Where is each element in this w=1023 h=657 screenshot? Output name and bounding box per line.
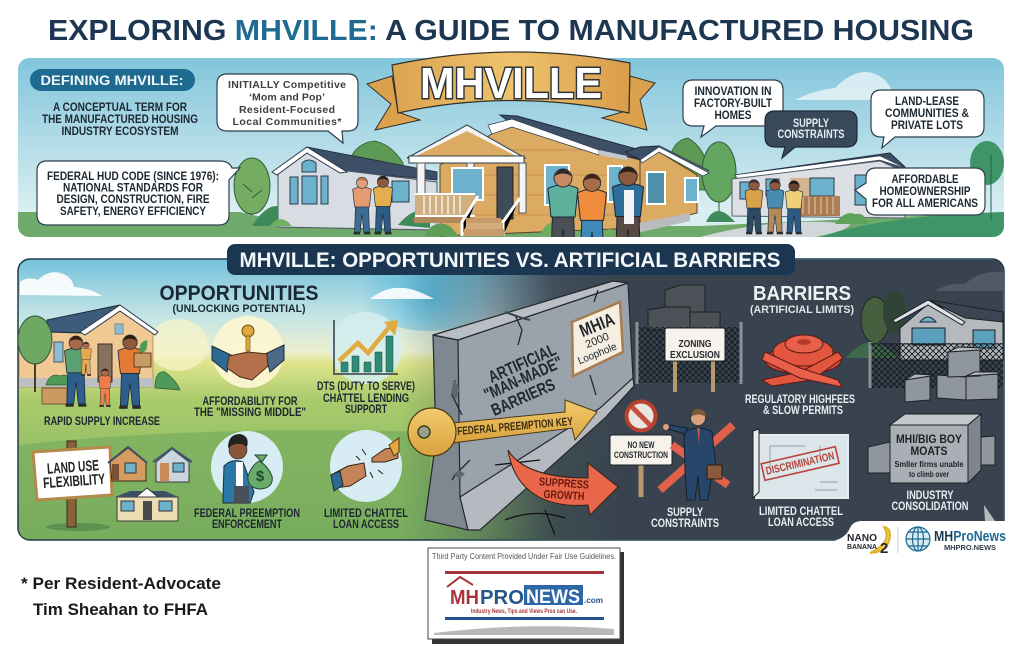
banner: MHVILLE: MHVILLE xyxy=(420,59,602,108)
callout: land-lease: LAND-LEASE xyxy=(895,96,959,108)
callout: affordable homeownership: HOMEOWNERSHIP xyxy=(880,186,971,198)
logo: MHProNews fair use: PRO xyxy=(480,587,524,609)
callout: innovation: FACTORY-BUILT xyxy=(694,98,772,110)
heading: opportunities xyxy=(160,282,318,315)
sign: land use flexibility: FLEXIBILITY xyxy=(43,471,106,492)
chart icon: DTS lending support: CHATTEL LENDING xyxy=(323,393,409,405)
heading: barriers xyxy=(750,283,854,316)
sign: MHIA loophole: Loophole xyxy=(576,341,619,367)
tree: left xyxy=(234,158,270,215)
callout: initially competitive: Local Communities* xyxy=(232,116,342,128)
arrow: federal preemption key: FEDERAL PREEMPTION KEY xyxy=(457,416,574,438)
logo: MHProNews fair use xyxy=(428,548,624,644)
illustration: big boy moats box: INDUSTRY xyxy=(906,490,954,502)
sign: MHIA loophole xyxy=(572,302,623,376)
callout: initially competitive: INITIALLY Competitive xyxy=(228,79,346,91)
people: couple xyxy=(353,176,392,234)
text: definition: THE MANUFACTURED HOUSING xyxy=(42,114,198,126)
illustration: big boy moats box: MHI/BIG BOY xyxy=(896,432,962,446)
heading: barriers: (ARTIFICIAL LIMITS) xyxy=(750,304,854,316)
illustration: fenced house and cubes xyxy=(846,290,1003,402)
text: artificial man-made barriers: "MAN-MADE" xyxy=(481,353,565,404)
icon: red tape: REGULATORY HIGHFEES xyxy=(745,394,855,406)
arrow: suppress growth: SUPPRESS xyxy=(539,476,590,492)
icon: federal preemption enforcement xyxy=(194,431,300,531)
sign: land use flexibility xyxy=(33,441,112,531)
chart icon: DTS lending support: DTS (DUTY TO SERVE) xyxy=(317,381,415,393)
illustration: supply constraints man and red X: CONSTRAINTS xyxy=(651,518,719,530)
illustration: big boy moats box: CONSOLIDATION xyxy=(892,501,968,513)
logo tab: Nano Banana and MHProNews xyxy=(828,505,1008,557)
illustration: big boy moats box xyxy=(868,414,995,513)
callout: innovation: HOMES xyxy=(714,110,752,122)
logo: MHProNews fair use: Third Party Content Provided Under Fair Use Guidelines. xyxy=(432,551,616,561)
heading tab: MHVILLE: OPPORTUNITIES VS. ARTIFICIAL BARRIERS xyxy=(240,249,780,272)
sign: MHIA loophole: 2000 xyxy=(584,331,611,351)
callout: federal HUD code: FEDERAL HUD CODE (SINCE 1976): xyxy=(47,171,219,183)
arrow: suppress growth: GROWTH xyxy=(543,489,585,503)
clouds xyxy=(20,272,434,299)
sign: no new construction: CONSTRUCTION xyxy=(614,450,668,460)
callout: land-lease: PRIVATE LOTS xyxy=(891,120,963,132)
callout: federal HUD code: NATIONAL STANDARDS FOR xyxy=(63,182,204,194)
chart icon: DTS lending support xyxy=(317,312,415,416)
panel: MHVille neighbourhood xyxy=(18,58,1004,237)
heading: opportunities: (UNLOCKING POTENTIAL) xyxy=(172,303,306,315)
logo tab: Nano Banana and MHProNews: MHPRO.NEWS xyxy=(944,543,996,552)
sun glow xyxy=(148,319,208,371)
icon: red tape xyxy=(745,335,855,417)
callout: federal HUD code xyxy=(37,161,240,225)
blueprint: discrimination: DISCRIMINATION xyxy=(765,450,836,478)
illustration: rapid supply increase xyxy=(18,305,180,428)
icon: handshake and key xyxy=(194,316,306,419)
heading: barriers: BARRIERS xyxy=(753,283,851,305)
icon: banana xyxy=(870,527,890,553)
title: EXPLORING MHVILLE: A GUIDE TO MANUFACTURED HOUSING xyxy=(48,15,974,47)
heading: defining MHVille: DEFINING MHVILLE: xyxy=(40,73,184,88)
callout: supply constraints xyxy=(765,111,857,158)
icon: limited chattel loan access xyxy=(324,430,408,531)
sign: land use flexibility: LAND USE xyxy=(47,457,100,478)
fence and boxes: zoning exclusion: EXCLUSION xyxy=(670,350,720,361)
cloud: barrier side xyxy=(935,272,1003,291)
callout: affordable homeownership xyxy=(855,168,985,215)
text: definition: INDUSTRY ECOSYSTEM xyxy=(62,126,178,138)
callout: supply constraints: SUPPLY xyxy=(793,118,829,130)
logo tab: Nano Banana and MHProNews: BANANA xyxy=(847,544,877,551)
callout: land-lease: COMMUNITIES & xyxy=(885,108,969,120)
callout: land-lease xyxy=(871,90,984,148)
sign: MHIA loophole: MHIA xyxy=(577,309,617,341)
callout: innovation xyxy=(683,80,783,137)
callout: initially competitive: ‘Mom and Pop’ xyxy=(249,92,325,104)
arrow: suppress growth xyxy=(508,450,618,515)
callout: initially competitive xyxy=(217,74,358,143)
text: artificial man-made barriers: ARTIFICIAL xyxy=(485,340,559,387)
fence and boxes: zoning exclusion xyxy=(637,285,742,392)
callout: supply constraints: CONSTRAINTS xyxy=(778,129,845,141)
logo: MHProNews fair use: MH xyxy=(450,587,479,609)
sign: no new construction xyxy=(610,402,672,497)
illustration: big boy moats box: MOATS xyxy=(910,444,948,458)
banner: MHVILLE xyxy=(367,52,655,130)
text: artificial man-made barriers xyxy=(481,340,565,420)
illustration: big boy moats box: Smller firms unable xyxy=(894,459,964,469)
icon: limited chattel loan access: LOAN ACCESS xyxy=(333,519,399,531)
logo tab: Nano Banana and MHProNews: NANO xyxy=(847,533,877,544)
house: left xyxy=(252,141,437,230)
heading: defining MHVille xyxy=(30,69,195,91)
cloud xyxy=(795,72,895,100)
panel: opportunities vs barriers xyxy=(18,259,1004,540)
logo: MHProNews fair use: Industry News, Tips and Views Pros can Use. xyxy=(471,609,577,615)
callout: affordable homeownership: FOR ALL AMERICANS xyxy=(872,198,978,210)
icon: federal preemption enforcement: ENFORCEMENT xyxy=(212,519,282,531)
logo: MHProNews fair use: .com xyxy=(584,595,603,605)
footnote: * Per Resident-Advocate xyxy=(21,574,221,593)
blueprint: discrimination xyxy=(753,429,848,529)
logo: MHProNews fair use: NEWS xyxy=(526,587,580,608)
illustration: concrete wall xyxy=(425,281,634,535)
callout: initially competitive: Resident-Focused xyxy=(239,104,335,116)
illustration: big boy moats box: to climb over xyxy=(909,469,950,479)
illustration: supply constraints man and red X xyxy=(651,409,733,530)
tree: far right xyxy=(970,141,1004,220)
icon: handshake and key: THE "MISSING MIDDLE" xyxy=(194,407,306,419)
arrow: federal preemption key xyxy=(408,400,597,456)
blueprint: discrimination: LIMITED CHATTEL xyxy=(759,506,843,518)
icon: federal preemption enforcement: FEDERAL PREEMPTION xyxy=(194,508,300,520)
logo tab: Nano Banana and MHProNews: MHProNews xyxy=(934,529,1006,545)
fence and boxes: zoning exclusion: ZONING xyxy=(678,339,712,350)
chart icon: DTS lending support: SUPPORT xyxy=(345,404,387,416)
logo tab: Nano Banana and MHProNews: 2 xyxy=(880,540,888,557)
icon: small houses xyxy=(108,447,192,521)
house: central xyxy=(398,115,736,236)
icon: globe xyxy=(906,527,930,551)
callout: innovation: INNOVATION IN xyxy=(694,86,772,98)
callout: federal HUD code: DESIGN, CONSTRUCTION, FIRE xyxy=(56,194,210,206)
footnote xyxy=(21,574,221,619)
text: definition: A CONCEPTUAL TERM FOR xyxy=(53,102,188,114)
icon: federal preemption enforcement: $ xyxy=(256,468,265,485)
illustration: supply constraints man and red X: SUPPLY xyxy=(667,507,703,519)
sign: no new construction: NO NEW xyxy=(628,440,655,450)
callout: affordable homeownership: AFFORDABLE xyxy=(892,174,959,186)
heading: opportunities: OPPORTUNITIES xyxy=(160,282,318,305)
footnote: Tim Sheahan to FHFA xyxy=(33,600,208,619)
callout: federal HUD code: SAFETY, ENERGY EFFICIENCY xyxy=(60,206,206,218)
people: central family xyxy=(548,166,644,237)
text: definition xyxy=(42,102,198,138)
text: artificial man-made barriers: BARRIERS xyxy=(488,375,558,420)
house: right xyxy=(732,153,905,224)
icon: handshake and key: AFFORDABILITY FOR xyxy=(202,396,298,408)
icon: red tape: & SLOW PERMITS xyxy=(763,405,843,417)
blueprint: discrimination: LOAN ACCESS xyxy=(768,517,834,529)
illustration: rapid supply increase: RAPID SUPPLY INCREASE xyxy=(44,416,160,428)
people: right group xyxy=(745,180,803,234)
icon: limited chattel loan access: LIMITED CHATTEL xyxy=(324,508,408,520)
